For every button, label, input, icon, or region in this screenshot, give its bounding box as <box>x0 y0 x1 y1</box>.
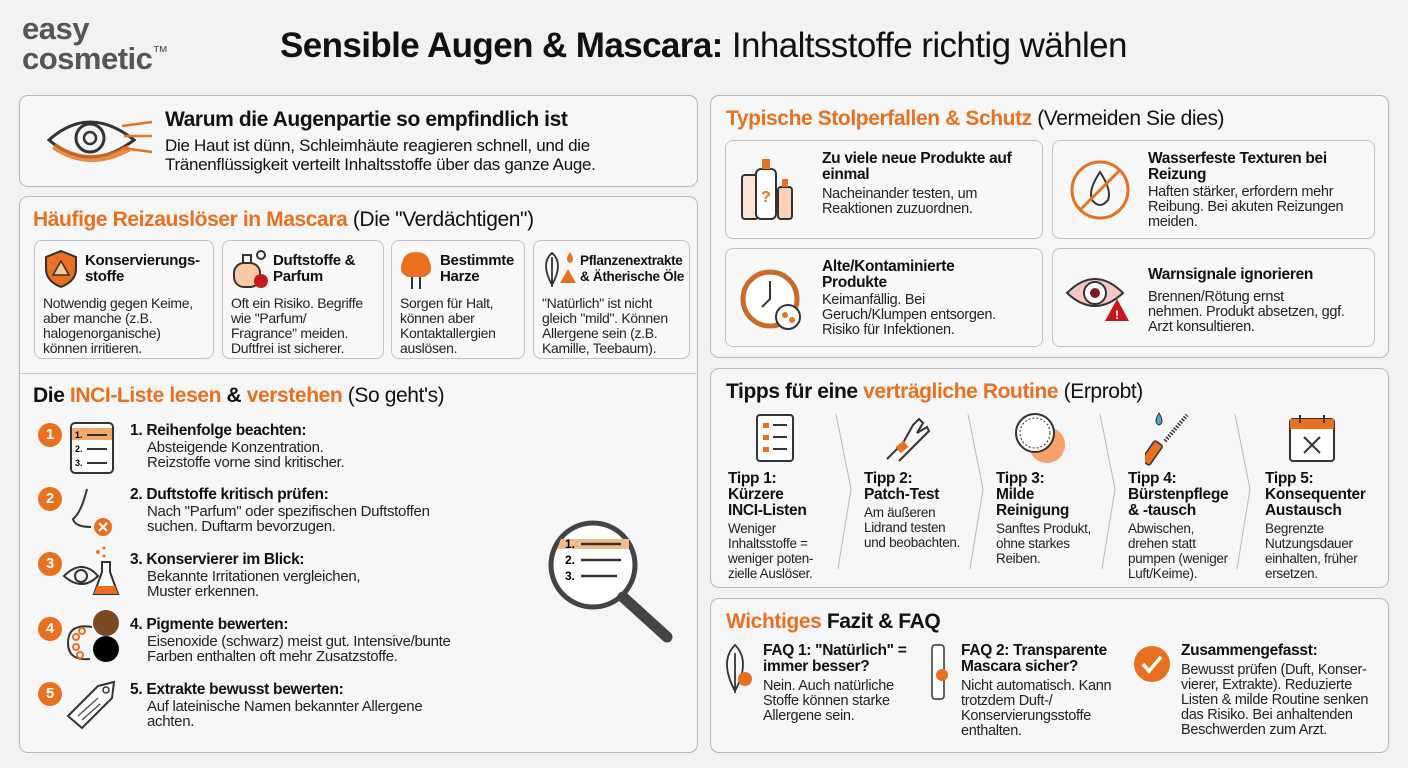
icon: red eye: ! <box>1115 308 1119 322</box>
card: warnsignale: nehmen. Produkt absetzen, ggf. <box>1148 304 1345 320</box>
tip 3: Reinigung <box>996 502 1069 519</box>
card: alte produkte <box>725 248 1043 347</box>
step 2: 2. Duftstoffe kritisch prüfen: <box>130 486 329 503</box>
icon: clock <box>740 270 801 330</box>
card: harze: Bestimmte <box>440 252 514 269</box>
tip 3: Tipp 3: <box>996 470 1044 487</box>
card: zu viele produkte: einmal <box>822 166 869 183</box>
step 1: Reizstoffe vorne sind kritischer. <box>147 454 344 471</box>
summary: Listen & milde Routine senken <box>1181 692 1368 708</box>
summary <box>1134 642 1368 738</box>
card: duftstoffe: Duftstoffe & <box>273 252 355 269</box>
tip 5: Tipp 5: <box>1265 470 1313 487</box>
icon: shield <box>45 250 77 288</box>
tip 1: Tipp 1: <box>728 470 776 487</box>
summary: Bewusst prüfen (Duft, Konser- <box>1181 662 1367 678</box>
tip 1: zielle Auslöser. <box>728 566 812 581</box>
tip 5: ersetzen. <box>1265 566 1318 581</box>
icon: magnifier: 3. <box>565 569 575 583</box>
icon: bottles <box>741 159 793 220</box>
faq 1: FAQ 1: "Natürlich" = <box>763 642 906 659</box>
card: harze: Sorgen für Halt, <box>400 295 493 311</box>
card: alte produkte: Risiko für Infektionen. <box>822 322 955 338</box>
tip 2: Patch-Test <box>864 486 939 503</box>
heading: stolperfallen: Typische Stolperfallen & Schutz (Vermeiden Sie dies) <box>726 107 1224 130</box>
card: pflanzenextrakte: gleich "mild". Können <box>542 310 668 326</box>
text: warum <box>165 136 596 174</box>
text: warum: Tränenflüssigkeit verteilt Inhaltsstoffe über das ganze Auge. <box>165 155 596 174</box>
card: alte produkte: Alte/Kontaminierte <box>822 258 954 275</box>
heading: warum: Warum die Augenpartie so empfindlich ist <box>165 108 568 131</box>
step 2: 2 <box>46 490 54 507</box>
card: duftstoffe: Parfum <box>273 268 323 285</box>
card: pflanzenextrakte <box>533 240 690 359</box>
icon: bottles: ? <box>761 189 771 206</box>
tip 3 <box>996 413 1091 566</box>
heading: tipps: Tipps für eine verträgliche Routine (Erprobt) <box>726 380 1143 403</box>
card: zu viele produkte: Reaktionen zuzuordnen. <box>822 201 973 217</box>
card: harze: Harze <box>440 268 479 285</box>
step 1 <box>38 422 344 474</box>
step 1: 3. <box>75 458 83 468</box>
heading: fazit: Wichtiges Fazit & FAQ <box>726 610 940 633</box>
step 5: 5 <box>46 685 54 702</box>
step 4 <box>38 610 451 665</box>
faq 2: FAQ 2: Transparente <box>961 642 1107 659</box>
card: konservierungsstoffe: Konservierungs- <box>85 252 200 269</box>
card: warnsignale: Warnsignale ignorieren <box>1148 266 1313 283</box>
tip 4: Tipp 4: <box>1128 470 1176 487</box>
card: wasserfest <box>1052 140 1375 239</box>
tip 4: pumpen (weniger <box>1128 551 1228 566</box>
step 5: 5. Extrakte bewusst bewerten: <box>130 681 344 698</box>
card: duftstoffe: wie "Parfum/ <box>231 310 306 326</box>
tip 2: und beobachten. <box>864 535 960 550</box>
faq 1: Stoffe können starke <box>763 693 890 709</box>
card: harze <box>391 240 525 359</box>
step 3: Bekannte Irritationen vergleichen, <box>147 568 360 585</box>
step 4: 4. Pigmente bewerten: <box>130 616 288 633</box>
step 3 <box>38 546 360 600</box>
faq 2: Konservierungsstoffe <box>961 708 1091 724</box>
tip 5: einhalten, früher <box>1265 551 1357 566</box>
tip 1: INCI-Listen <box>728 502 807 519</box>
tip 4: Luft/Keime). <box>1128 566 1197 581</box>
step 5 <box>38 680 422 730</box>
tip 3: Sanftes Produkt, <box>996 521 1091 536</box>
faq 2: Nicht automatisch. Kann <box>961 678 1111 694</box>
step 5: achten. <box>147 713 194 730</box>
card: wasserfest: Reibung. Bei akuten Reizungen <box>1148 199 1343 215</box>
logo <box>22 11 168 76</box>
tip 4: drehen statt <box>1128 536 1196 551</box>
step 4: Farben enthalten oft mehr Zusatzstoffe. <box>147 648 398 665</box>
summary: Beschwerden zum Arzt. <box>1181 722 1327 738</box>
faq 2: enthalten. <box>961 723 1022 739</box>
tip 1: Weniger <box>728 521 776 536</box>
tip 4: Abwischen, <box>1128 521 1194 536</box>
step 2 <box>38 486 430 536</box>
icon: magnifier: 1. <box>565 537 575 551</box>
summary: das Risiko. Bei anhaltenden <box>1181 707 1353 723</box>
step 2: Nach "Parfum" oder spezifischen Duftstoffen <box>147 503 430 520</box>
icon: perfume <box>233 250 268 288</box>
card: duftstoffe: Oft ein Risiko. Begriffe <box>231 295 363 311</box>
step 1: Absteigende Konzentration. <box>147 439 324 456</box>
tip 1 <box>728 414 813 581</box>
summary: Zusammengefasst: <box>1181 642 1317 659</box>
card: pflanzenextrakte: Kamille, Teebaum). <box>542 340 656 356</box>
tip 4: Bürstenpflege <box>1128 486 1228 503</box>
tip 2: Tipp 2: <box>864 470 912 487</box>
step 4: Eisenoxide (schwarz) meist gut. Intensive/bunte <box>147 633 451 650</box>
step 1: 2. <box>75 444 83 454</box>
icon: eye <box>46 120 152 162</box>
faq 1: immer besser? <box>763 658 869 675</box>
panel: reizauslöser & inci <box>19 196 698 753</box>
logo: cosmetic™ <box>22 41 168 76</box>
step 4: 4 <box>46 620 54 637</box>
card: wasserfest: Haften stärker, erfordern mehr <box>1148 184 1333 200</box>
card: konservierungsstoffe: stoffe <box>85 268 124 285</box>
tip 2 <box>864 418 960 550</box>
faq 1: Allergene sein. <box>763 708 854 724</box>
card: warnsignale: Brennen/Rötung ernst <box>1148 289 1284 305</box>
card: warnsignale: Arzt konsultieren. <box>1148 319 1255 335</box>
step 3: Muster erkennen. <box>147 583 259 600</box>
icon: magnifier <box>548 520 672 642</box>
card: wasserfest: meiden. <box>1148 214 1198 230</box>
icon: no drop <box>1070 160 1130 220</box>
panel: warum <box>19 95 698 187</box>
card: wasserfest: Reizung <box>1148 166 1206 183</box>
title: Sensible Augen & Mascara: Inhaltsstoffe richtig wählen <box>280 26 1127 65</box>
text: warum: Die Haut ist dünn, Schleimhäute reagieren schnell, und die <box>165 136 590 155</box>
card: duftstoffe <box>222 240 384 359</box>
tip 5: Austausch <box>1265 502 1342 519</box>
faq 2: trotzdem Duft-/ <box>961 693 1052 709</box>
heading: inci: Die INCI-Liste lesen & verstehen (So geht's) <box>33 384 444 407</box>
card: konservierungsstoffe: halogenorganische) <box>43 325 161 341</box>
tip 1: Inhaltsstoffe = <box>728 536 808 551</box>
tip 1: weniger poten- <box>728 551 813 566</box>
icon: tree <box>400 252 432 289</box>
step 5: Auf lateinische Namen bekannter Allergene <box>147 698 422 715</box>
tip 3: Milde <box>996 486 1034 503</box>
step 3: 3 <box>46 555 54 572</box>
icon: leaf <box>545 252 576 287</box>
card: zu viele produkte <box>725 140 1043 239</box>
step 1: 1. Reihenfolge beachten: <box>130 422 306 439</box>
card: alte produkte: Geruch/Klumpen entsorgen. <box>822 307 996 323</box>
logo: easy <box>22 11 89 46</box>
tip 5: Begrenzte <box>1265 521 1324 536</box>
icon: red eye <box>1066 278 1129 322</box>
card: wasserfest: Wasserfeste Texturen bei <box>1148 150 1327 167</box>
step 2: suchen. Duftarm bevorzugen. <box>147 518 336 535</box>
heading: häufige reizauslöser: Häufige Reizauslöser in Mascara (Die "Verdächtigen") <box>33 208 534 231</box>
tip 1: Kürzere <box>728 486 784 503</box>
card: zu viele produkte: Zu viele neue Produkte auf <box>822 150 1011 167</box>
tip 2: Lidrand testen <box>864 520 945 535</box>
card: pflanzenextrakte: Allergene sein (z.B. <box>542 325 657 341</box>
summary: vierer, Extrakte). Reduzierte <box>1181 677 1352 693</box>
tip 5: Nutzungsdauer <box>1265 536 1353 551</box>
card: konservierungsstoffe: können irritieren. <box>43 340 142 356</box>
tip 4: & -tausch <box>1128 502 1196 519</box>
faq 1 <box>726 642 906 724</box>
step 3: 3. Konservierer im Blick: <box>130 551 304 568</box>
icon: magnifier: 2. <box>565 553 575 567</box>
panel: stolperfallen <box>710 95 1389 358</box>
card: duftstoffe: Duftfrei ist sicherer. <box>231 340 344 356</box>
card: alte produkte: Keimanfällig. Bei <box>822 292 925 308</box>
faq 2: Mascara sicher? <box>961 658 1078 675</box>
card: harze: auslösen. <box>400 340 457 356</box>
tip 3: Reiben. <box>996 551 1040 566</box>
panel: fazit <box>710 598 1389 753</box>
list: inci steps <box>38 422 451 730</box>
card: pflanzenextrakte: & Ätherische Öle <box>580 269 684 284</box>
card: pflanzenextrakte: Pflanzenextrakte <box>580 253 682 268</box>
step 1: 1 <box>46 426 54 443</box>
card: warnsignale <box>1052 248 1375 347</box>
card: duftstoffe: Fragrance" meiden. <box>231 325 348 341</box>
card: konservierungsstoffe: Notwendig gegen Keime, <box>43 295 193 311</box>
tip 5: Konsequenter <box>1265 486 1366 503</box>
tip 2: Am äußeren <box>864 505 935 520</box>
faq 2 <box>931 642 1111 739</box>
card: harze: können aber <box>400 310 475 326</box>
card: konservierungsstoffe <box>34 240 214 359</box>
faq 1: Nein. Auch natürliche <box>763 678 894 694</box>
tip 3: ohne starkes <box>996 536 1070 551</box>
tip 4 <box>1128 412 1228 581</box>
card: alte produkte: Produkte <box>822 274 887 291</box>
tip 5 <box>1265 415 1366 581</box>
card: pflanzenextrakte: "Natürlich" ist nicht <box>542 295 652 311</box>
step 1: 1. <box>75 430 83 440</box>
panel: tipps <box>710 368 1389 588</box>
card: konservierungsstoffe: aber manche (z.B. <box>43 310 152 326</box>
card: harze: Kontaktallergien <box>400 325 496 341</box>
card: zu viele produkte: Nacheinander testen, um <box>822 186 977 202</box>
